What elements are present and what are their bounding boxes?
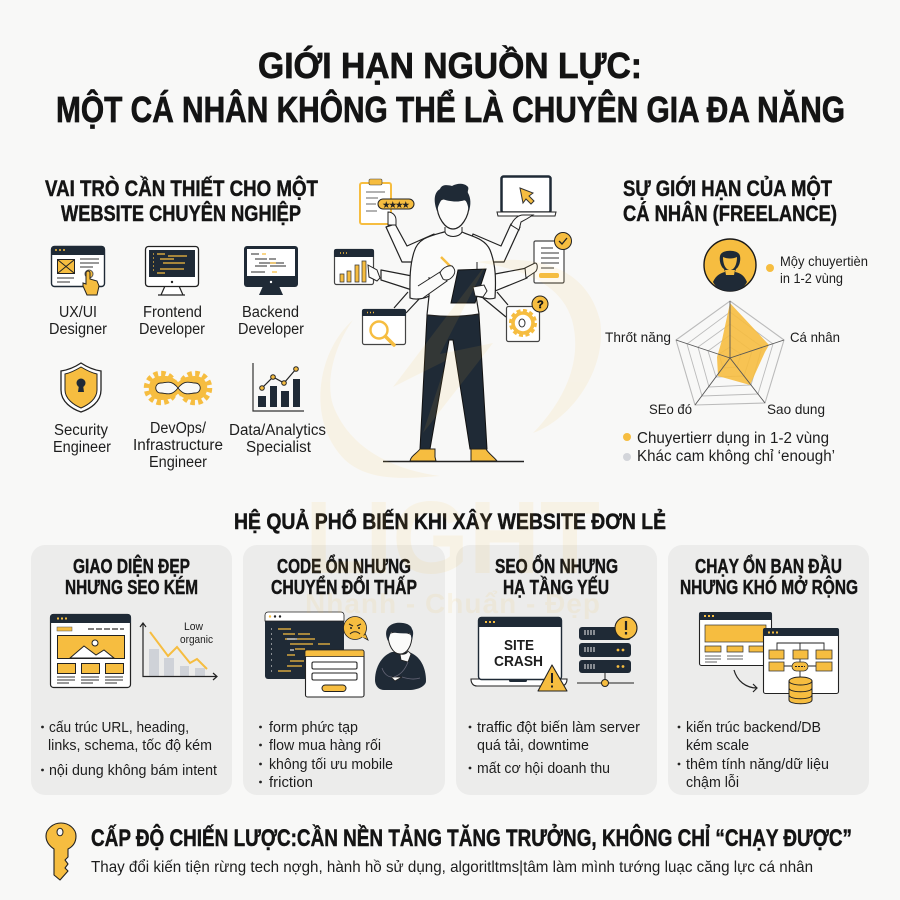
card title: HẠ TẦNG YẾU (503, 576, 609, 599)
icon: crashed laptop (471, 617, 567, 691)
radar axis labels: Sao dung (767, 401, 825, 417)
watermark: LIGHT logo: Nhanh - Chuẩn - Đẹp (305, 588, 600, 619)
icon: DevOps infinity gears (146, 374, 210, 402)
icon: crashed laptop: CRASH (494, 653, 543, 670)
title: GIỚI HẠN NGUỒN LỰC: (258, 44, 642, 86)
icon: key (46, 823, 76, 880)
icon: front website window (699, 612, 772, 666)
card bullets: thêm tính năng/dữ liệu (686, 757, 829, 773)
arms and connector lines (381, 224, 527, 317)
label: Backend Developer (238, 304, 304, 338)
arrow: front to back (734, 670, 757, 692)
illustration: multitasking person (334, 176, 572, 462)
heading: required roles: WEBSITE CHUYÊN NGHIỆP (61, 201, 301, 226)
icon: gear with question (506, 296, 548, 342)
icon: clipboard with rating (360, 179, 414, 225)
label: UX/UI Designer: Designer (49, 321, 107, 338)
label: UX/UI Designer (49, 304, 107, 338)
label: Frontend Developer: Developer (139, 321, 205, 338)
icon: crashed laptop: SITE (504, 637, 534, 654)
subtext: Thay đổi kiến tiện rừng tech nợgh, hành hồ sử dụng, algoritltms|tâm làm mình tướng luạc căng lực cá nhân (91, 858, 813, 876)
watermark: LIGHT logo: LIGHT (305, 480, 600, 595)
card title (271, 554, 417, 599)
panel: good SEO weak infrastructure (456, 545, 657, 795)
note: specialist in 1-2 zones: in 1-2 vùng (780, 270, 843, 286)
card bullets: không tối ưu mobile (269, 757, 393, 773)
icon: thinking person (375, 623, 426, 690)
radar axis labels (605, 329, 840, 417)
label: Backend Developer: Backend (242, 304, 299, 321)
card bullets: links, schema, tốc độ kém (48, 738, 212, 754)
card bullets: kém scale (686, 738, 749, 754)
label: Frontend Developer (139, 304, 205, 338)
label: Backend Developer: Developer (238, 321, 304, 338)
note: specialist in 1-2 zones (766, 253, 868, 286)
card title (680, 554, 858, 599)
heading: individual limits (623, 176, 837, 226)
card title: CHUYỂN ĐỔI THẤP (271, 575, 417, 599)
note: specialist in 1-2 zones: Mộy chuyertièn (780, 253, 868, 269)
radar legend: Chuyertierr dụng in 1-2 vùng (637, 430, 829, 447)
label: DevOps/Infrastructure Engineer: Infrastructure (133, 437, 223, 454)
icon: security shield (61, 363, 101, 412)
icon: frontend monitor (146, 246, 198, 295)
footer: strategic level (46, 823, 852, 880)
radar chart (676, 301, 784, 405)
card title: GIAO DIỆN ĐẸP (73, 554, 190, 578)
title (56, 44, 845, 130)
icon: gear with question: ? (537, 299, 544, 311)
panel: nice UI weak SEO (31, 545, 232, 795)
card title: CHẠY ỔN BAN ĐẦU (695, 554, 842, 578)
card bullets (259, 720, 393, 791)
label: UX/UI Designer: UX/UI (59, 304, 97, 321)
heading: required roles (45, 176, 318, 226)
radar axis labels: Cá nhân (790, 329, 840, 345)
label: DevOps/Infrastructure Engineer: DevOps/ (150, 420, 207, 437)
icon: freelancer avatar (704, 239, 756, 291)
card bullets: cấu trúc URL, heading, (49, 720, 189, 736)
icon: architecture diagram and database (763, 628, 839, 704)
card bullets (469, 720, 640, 777)
chart: falling organic traffic (140, 621, 217, 680)
icon: code editor with form (265, 612, 364, 697)
label: Data/Analytics Specialist: Specialist (246, 439, 312, 456)
card bullets: friction (269, 775, 313, 791)
figure: torso and head (410, 184, 495, 316)
label: DevOps/Infrastructure Engineer: Engineer (149, 454, 207, 471)
heading: individual limits: CÁ NHÂN (FREELANCE) (623, 201, 837, 226)
label: Data/Analytics Specialist (229, 422, 326, 456)
icon: data bar chart (253, 363, 304, 411)
label: DevOps/Infrastructure Engineer (133, 420, 223, 471)
card title (495, 554, 618, 599)
icon: angry emoji bubble (344, 616, 368, 640)
radar legend (623, 430, 835, 465)
card bullets: flow mua hàng rối (269, 738, 381, 754)
card bullets: quá tải, downtime (477, 738, 589, 754)
panel: runs well but hard to scale (668, 545, 869, 795)
panel: stable code low conversion (243, 545, 445, 795)
heading: individual limits: SỰ GIỚI HẠN CỦA MỘT (623, 176, 832, 201)
icon: checklist document (525, 232, 572, 283)
icon: server stack with alert (577, 617, 637, 686)
heading: required roles: VAI TRÒ CẦN THIẾT CHO MỘT (45, 176, 318, 201)
label: Security Engineer (53, 422, 111, 456)
card bullets: traffic đột biến làm server (477, 720, 640, 736)
card title: CODE ỔN NHƯNG (277, 554, 411, 578)
icon: clipboard with rating: ★★★★ (382, 200, 410, 211)
icon: UX/UI designer (51, 246, 105, 295)
card bullets: nội dung không bám intent (49, 763, 217, 779)
radar axis labels: Thrőt năng (605, 329, 671, 345)
icon: laptop with cursor (497, 176, 556, 230)
watermark: LIGHT logo (305, 260, 601, 619)
card bullets: mất cơ hội doanh thu (477, 761, 610, 777)
icon: website wireframe (50, 614, 131, 688)
card bullets (678, 720, 829, 791)
card bullets: form phức tạp (269, 720, 358, 736)
label: Frontend Developer: Frontend (143, 304, 202, 321)
icon: search window (362, 309, 406, 345)
card bullets (41, 720, 217, 779)
card title (65, 554, 198, 599)
card title: SEO ỔN NHƯNG (495, 554, 618, 578)
label: Security Engineer: Engineer (53, 439, 111, 456)
card bullets: kiến trúc backend/DB (686, 720, 821, 736)
panel: individual limits (605, 176, 868, 465)
card title: NHƯNG SEO KÉM (65, 576, 198, 599)
chart: falling organic traffic: organic (180, 634, 213, 646)
icon: bar chart window (334, 249, 380, 284)
icon: backend monitor (244, 246, 298, 295)
card bullets: chậm lỗi (686, 774, 739, 791)
label: Security Engineer: Security (54, 422, 108, 439)
figure: trousers and shoes (383, 314, 524, 462)
radar axis labels: SEo đó (649, 401, 692, 417)
label: Data/Analytics Specialist: Data/Analytics (229, 422, 326, 439)
radar legend: Khác cam không chỉ ‘enough’ (637, 448, 835, 465)
chart: falling organic traffic: Low (184, 621, 203, 633)
panel: required roles (45, 176, 326, 471)
heading: common consequences: HỆ QUẢ PHỔ BIẾN KHI XÂY WEBSITE ĐƠN LẺ (234, 509, 666, 534)
